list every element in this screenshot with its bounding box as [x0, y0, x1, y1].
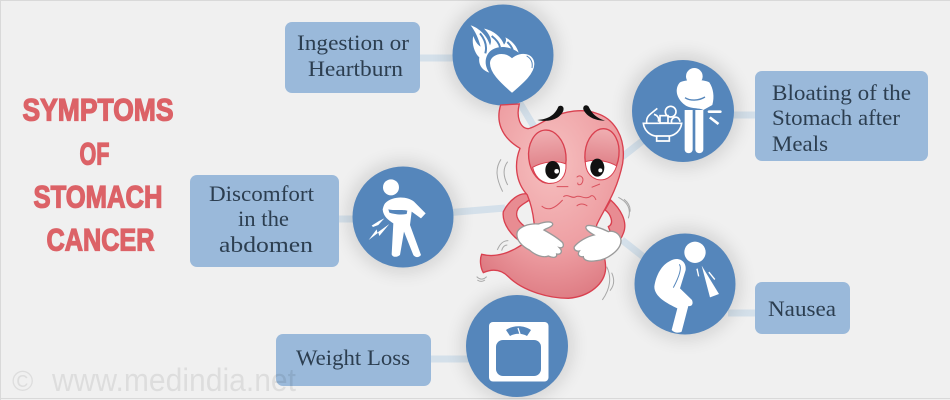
left glove — [517, 222, 563, 257]
title: SYMPTOMS — [22, 92, 174, 128]
icon: weighing scale — [466, 295, 568, 397]
stomach arm: left — [503, 194, 531, 243]
label: weight loss: Weight Loss — [296, 345, 410, 370]
icon: person with nausea — [634, 234, 736, 334]
label: discomfort: abdomen — [219, 232, 313, 257]
stomach face details — [542, 176, 600, 209]
stomach character — [477, 104, 630, 300]
watermark: www.medindia.net — [51, 362, 296, 398]
label: ingestion or heartburn — [285, 22, 420, 93]
stomach eyebrows — [537, 105, 605, 121]
icon: person with abdominal pain — [352, 166, 454, 268]
label: weight loss — [276, 334, 431, 386]
label: discomfort: in the — [238, 206, 289, 231]
label: discomfort: Discomfort — [209, 181, 315, 206]
stomach arm: right — [605, 200, 625, 243]
label: ingestion or heartburn: Heartburn — [308, 56, 403, 81]
label: bloating: Bloating of the — [772, 80, 911, 105]
right glove — [574, 225, 621, 261]
label: bloating — [755, 71, 928, 161]
title: OF — [80, 136, 110, 172]
watermark: © — [12, 366, 33, 398]
label: ingestion or heartburn: Ingestion or — [297, 30, 410, 55]
stomach eyelids — [526, 128, 569, 185]
shake marks — [477, 159, 630, 300]
stomach eye right — [585, 160, 617, 180]
title — [22, 92, 174, 258]
stomach eye left — [533, 162, 566, 183]
stomach body — [480, 104, 623, 298]
title: STOMACH — [34, 178, 162, 214]
label: bloating: Stomach after — [772, 105, 901, 130]
label: bloating: Meals — [772, 131, 828, 156]
label: nausea: Nausea — [768, 296, 836, 321]
icon: person bloating with food bowl — [632, 60, 734, 162]
label: nausea — [755, 282, 850, 334]
label: discomfort — [190, 175, 339, 267]
icon: burning heart — [452, 4, 554, 106]
title: CANCER — [46, 222, 155, 258]
connector lines — [335, 58, 760, 359]
circle shadows — [348, 0, 740, 400]
